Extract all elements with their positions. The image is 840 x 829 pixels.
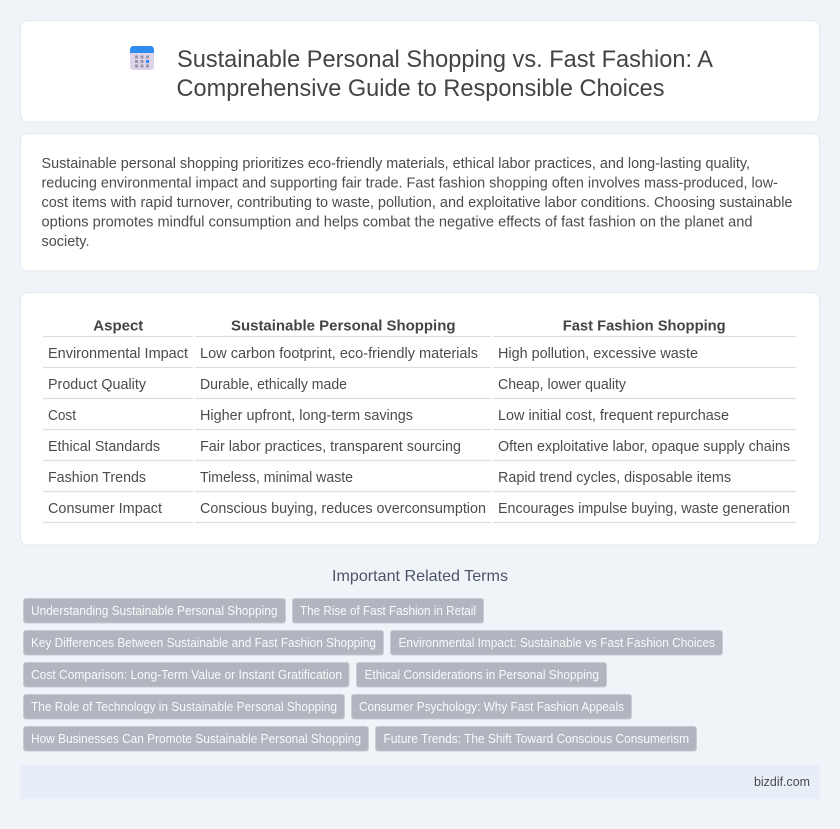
intro paragraph — [42, 156, 792, 250]
panel: introduction — [20, 134, 820, 271]
intro paragraph: options promotes mindful consumption and helps combat the negative effects of fast fashion on the planet and — [42, 214, 752, 230]
tag — [356, 662, 606, 687]
table header row: Sustainable Personal Shopping — [231, 318, 456, 334]
row: ethical standards: Often exploitative labor, opaque supply chains — [498, 439, 790, 455]
row: product quality: Durable, ethically made — [200, 377, 347, 393]
tag — [376, 726, 696, 751]
row: product quality: Cheap, lower quality — [498, 377, 627, 393]
row: environmental impact — [48, 346, 698, 362]
row: consumer impact — [48, 501, 790, 517]
tag: Future Trends: The Shift Toward Conscious Consumerism — [384, 732, 689, 746]
tag: The Role of Technology in Sustainable Personal Shopping — [31, 700, 337, 714]
row: environmental impact: Low carbon footprint, eco-friendly materials — [200, 346, 478, 362]
row: product quality: Product Quality — [48, 377, 147, 393]
row: cost: Low initial cost, frequent repurchase — [498, 408, 729, 424]
intro paragraph: reducing environmental impact and supporting fair trade. Fast fashion shopping often involves mass-produced, low- — [42, 176, 778, 192]
tag — [24, 662, 349, 687]
icon: calendar — [130, 46, 154, 70]
panel: header — [20, 20, 820, 122]
tag: Key Differences Between Sustainable and Fast Fashion Shopping — [31, 636, 376, 650]
tag: Understanding Sustainable Personal Shopping — [31, 604, 278, 618]
tag: How Businesses Can Promote Sustainable Personal Shopping — [31, 732, 361, 746]
footer source text: bizdif.com — [754, 774, 810, 789]
tag — [24, 598, 286, 623]
row: product quality — [48, 377, 627, 393]
tag — [24, 630, 384, 655]
row: fashion trends: Fashion Trends — [48, 470, 146, 486]
tag — [24, 694, 344, 719]
intro paragraph: cost items with rapid turnover, contributing to waste, pollution, and exploitative labor conditions. Choosing sustainable — [42, 195, 792, 211]
row: environmental impact: Environmental Impact — [48, 346, 188, 362]
title: Comprehensive Guide to Responsible Choices — [176, 75, 664, 102]
panel: comparison table — [20, 292, 820, 545]
title — [176, 46, 714, 102]
row: consumer impact: Conscious buying, reduces overconsumption — [200, 501, 486, 517]
table header row — [93, 318, 726, 334]
row: ethical standards — [48, 439, 790, 455]
tag: Ethical Considerations in Personal Shopping — [364, 668, 599, 682]
tag: Cost Comparison: Long-Term Value or Instant Gratification — [31, 668, 342, 682]
row: cost: Cost — [48, 408, 76, 424]
tag — [292, 598, 484, 623]
tag: Environmental Impact: Sustainable vs Fast Fashion Choices — [398, 636, 715, 650]
tag list — [24, 598, 722, 751]
heading: important related terms: Important Related Terms — [332, 568, 508, 585]
row: environmental impact: High pollution, excessive waste — [498, 346, 698, 362]
row: fashion trends: Rapid trend cycles, disposable items — [498, 470, 731, 486]
row: cost — [48, 408, 729, 424]
table header row: Aspect — [93, 318, 143, 334]
tag: The Rise of Fast Fashion in Retail — [300, 604, 476, 618]
row: fashion trends — [48, 470, 731, 486]
table header row: Fast Fashion Shopping — [563, 318, 726, 334]
intro paragraph: Sustainable personal shopping prioritizes eco-friendly materials, ethical labor practices, and long-lasting quality, — [42, 156, 750, 172]
row: consumer impact: Consumer Impact — [48, 501, 162, 517]
tag — [24, 726, 368, 751]
row: fashion trends: Timeless, minimal waste — [200, 470, 353, 486]
row: ethical standards: Ethical Standards — [48, 439, 160, 455]
tag — [390, 630, 722, 655]
intro paragraph: society. — [42, 234, 90, 250]
footer — [20, 765, 820, 799]
row: ethical standards: Fair labor practices, transparent sourcing — [200, 439, 461, 455]
row: consumer impact: Encourages impulse buying, waste generation — [498, 501, 790, 517]
tag — [352, 694, 632, 719]
row: cost: Higher upfront, long-term savings — [200, 408, 413, 424]
tag: Consumer Psychology: Why Fast Fashion Appeals — [359, 700, 624, 714]
title: Sustainable Personal Shopping vs. Fast Fashion: A — [177, 46, 714, 73]
